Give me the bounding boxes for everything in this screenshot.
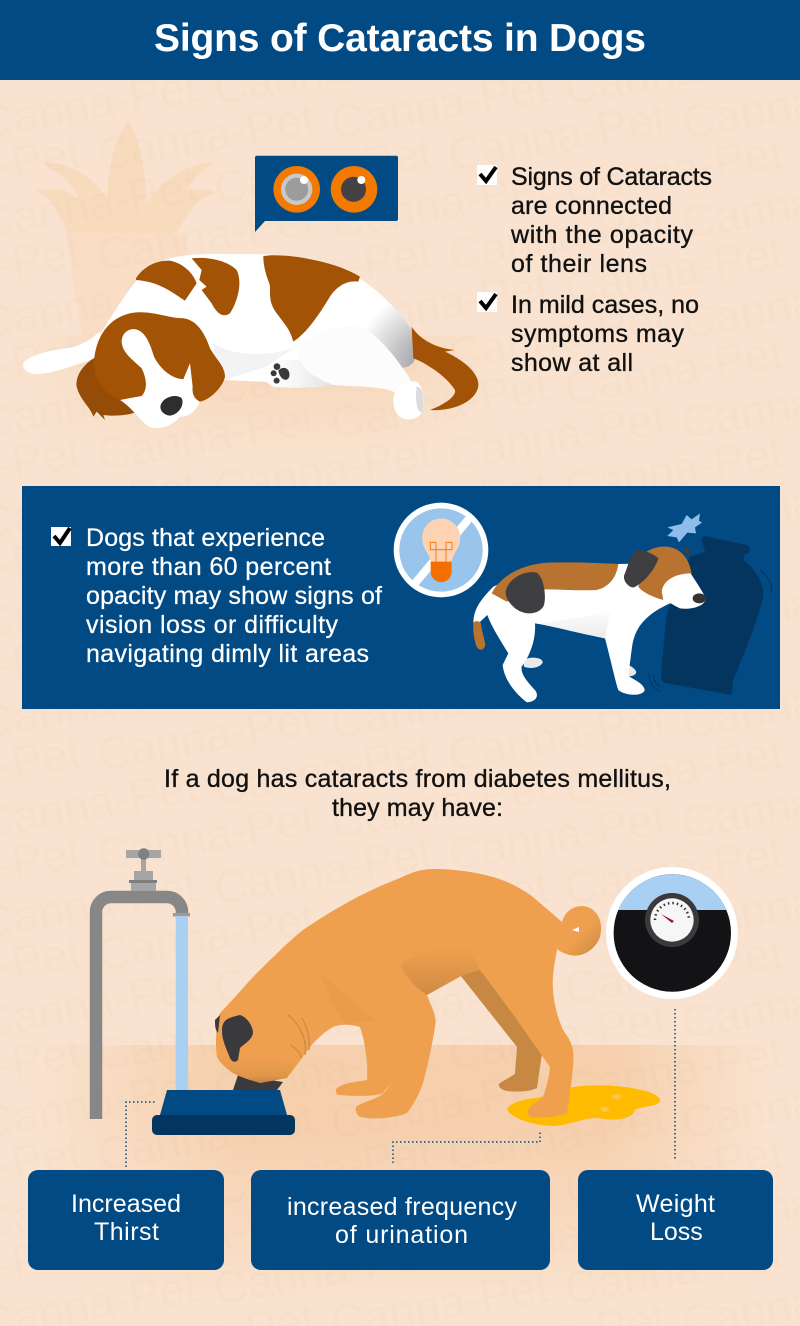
eye: healthy (331, 166, 377, 213)
eye: clouded (273, 166, 320, 213)
checkbox and text: Dogs that experience (86, 524, 325, 552)
label: weight loss (578, 1170, 773, 1270)
header bar (0, 0, 800, 80)
far hind leg (460, 960, 542, 1092)
title: Signs of Cataracts in Dogs (154, 17, 646, 60)
heading: diabetes: If a dog has cataracts from diabetes mellitus, (164, 765, 671, 793)
checklist: opacity: are connected (511, 192, 672, 220)
wrinkles (288, 1015, 309, 1058)
far ear (76, 357, 140, 420)
checkbox and text: navigating dimly lit areas (86, 640, 369, 668)
checklist: mild cases: In mild cases, no (511, 291, 699, 319)
icon: scale (606, 867, 738, 999)
tail (412, 327, 478, 410)
chin shade (217, 1050, 296, 1083)
muzzle (662, 573, 706, 609)
speech bubble with eyes (255, 156, 398, 232)
sleeping dog (23, 254, 478, 428)
brown saddle (492, 562, 618, 602)
dog ear (624, 550, 658, 588)
heading: diabetes (164, 765, 671, 822)
dotted connectors (126, 1009, 675, 1167)
jar (661, 536, 763, 695)
checklist: mild cases (477, 291, 699, 377)
haunch shade (400, 945, 480, 995)
checkbox and text: opacity may show signs of (86, 582, 382, 610)
checklist: mild cases: symptoms may (511, 320, 684, 348)
checklist: opacity: Signs of Cataracts (511, 163, 712, 191)
face blaze (120, 329, 200, 428)
shoulder shade (320, 973, 376, 1024)
label: weight loss: Weight (636, 1190, 715, 1218)
puddle (507, 1085, 660, 1126)
background plant (36, 120, 217, 337)
label: increased urination (251, 1170, 550, 1270)
checklist: opacity: with the opacity (510, 221, 694, 249)
label: increased thirst: Thirst (94, 1218, 159, 1246)
checkbox and text (51, 524, 382, 668)
mouth (233, 1075, 283, 1090)
label: increased urination: increased frequency (287, 1193, 518, 1221)
icon: no light bulb (394, 503, 488, 597)
head (638, 547, 692, 600)
jar motion lines (649, 570, 772, 692)
checklist: opacity: of their lens (511, 250, 647, 278)
water stream (176, 916, 188, 1090)
faucet (96, 848, 190, 1119)
paw pads (271, 363, 289, 384)
heading: diabetes: they may have: (332, 794, 503, 822)
checklist: mild cases: show at all (511, 349, 633, 377)
head (94, 312, 225, 410)
orange dog drinking (215, 869, 601, 1118)
water bowl (152, 1090, 295, 1135)
nose (160, 396, 183, 416)
tail (555, 906, 601, 956)
dog bumping into jar (473, 547, 706, 702)
label: weight loss: Loss (650, 1218, 703, 1246)
dark patch (506, 572, 545, 613)
ear (222, 1015, 253, 1062)
label: increased urination: of urination (335, 1221, 468, 1249)
checkbox and text: vision loss or difficulty (86, 611, 338, 639)
impact star (667, 513, 702, 542)
label: increased thirst (28, 1170, 224, 1270)
checkbox and text: more than 60 percent (86, 553, 331, 581)
panel: vision loss (22, 486, 780, 709)
tail tip (473, 621, 485, 650)
label: increased thirst: Increased (71, 1190, 181, 1218)
body (216, 869, 573, 1118)
dog nose (693, 593, 706, 603)
checklist: opacity (477, 163, 712, 278)
brown patches (136, 255, 360, 342)
